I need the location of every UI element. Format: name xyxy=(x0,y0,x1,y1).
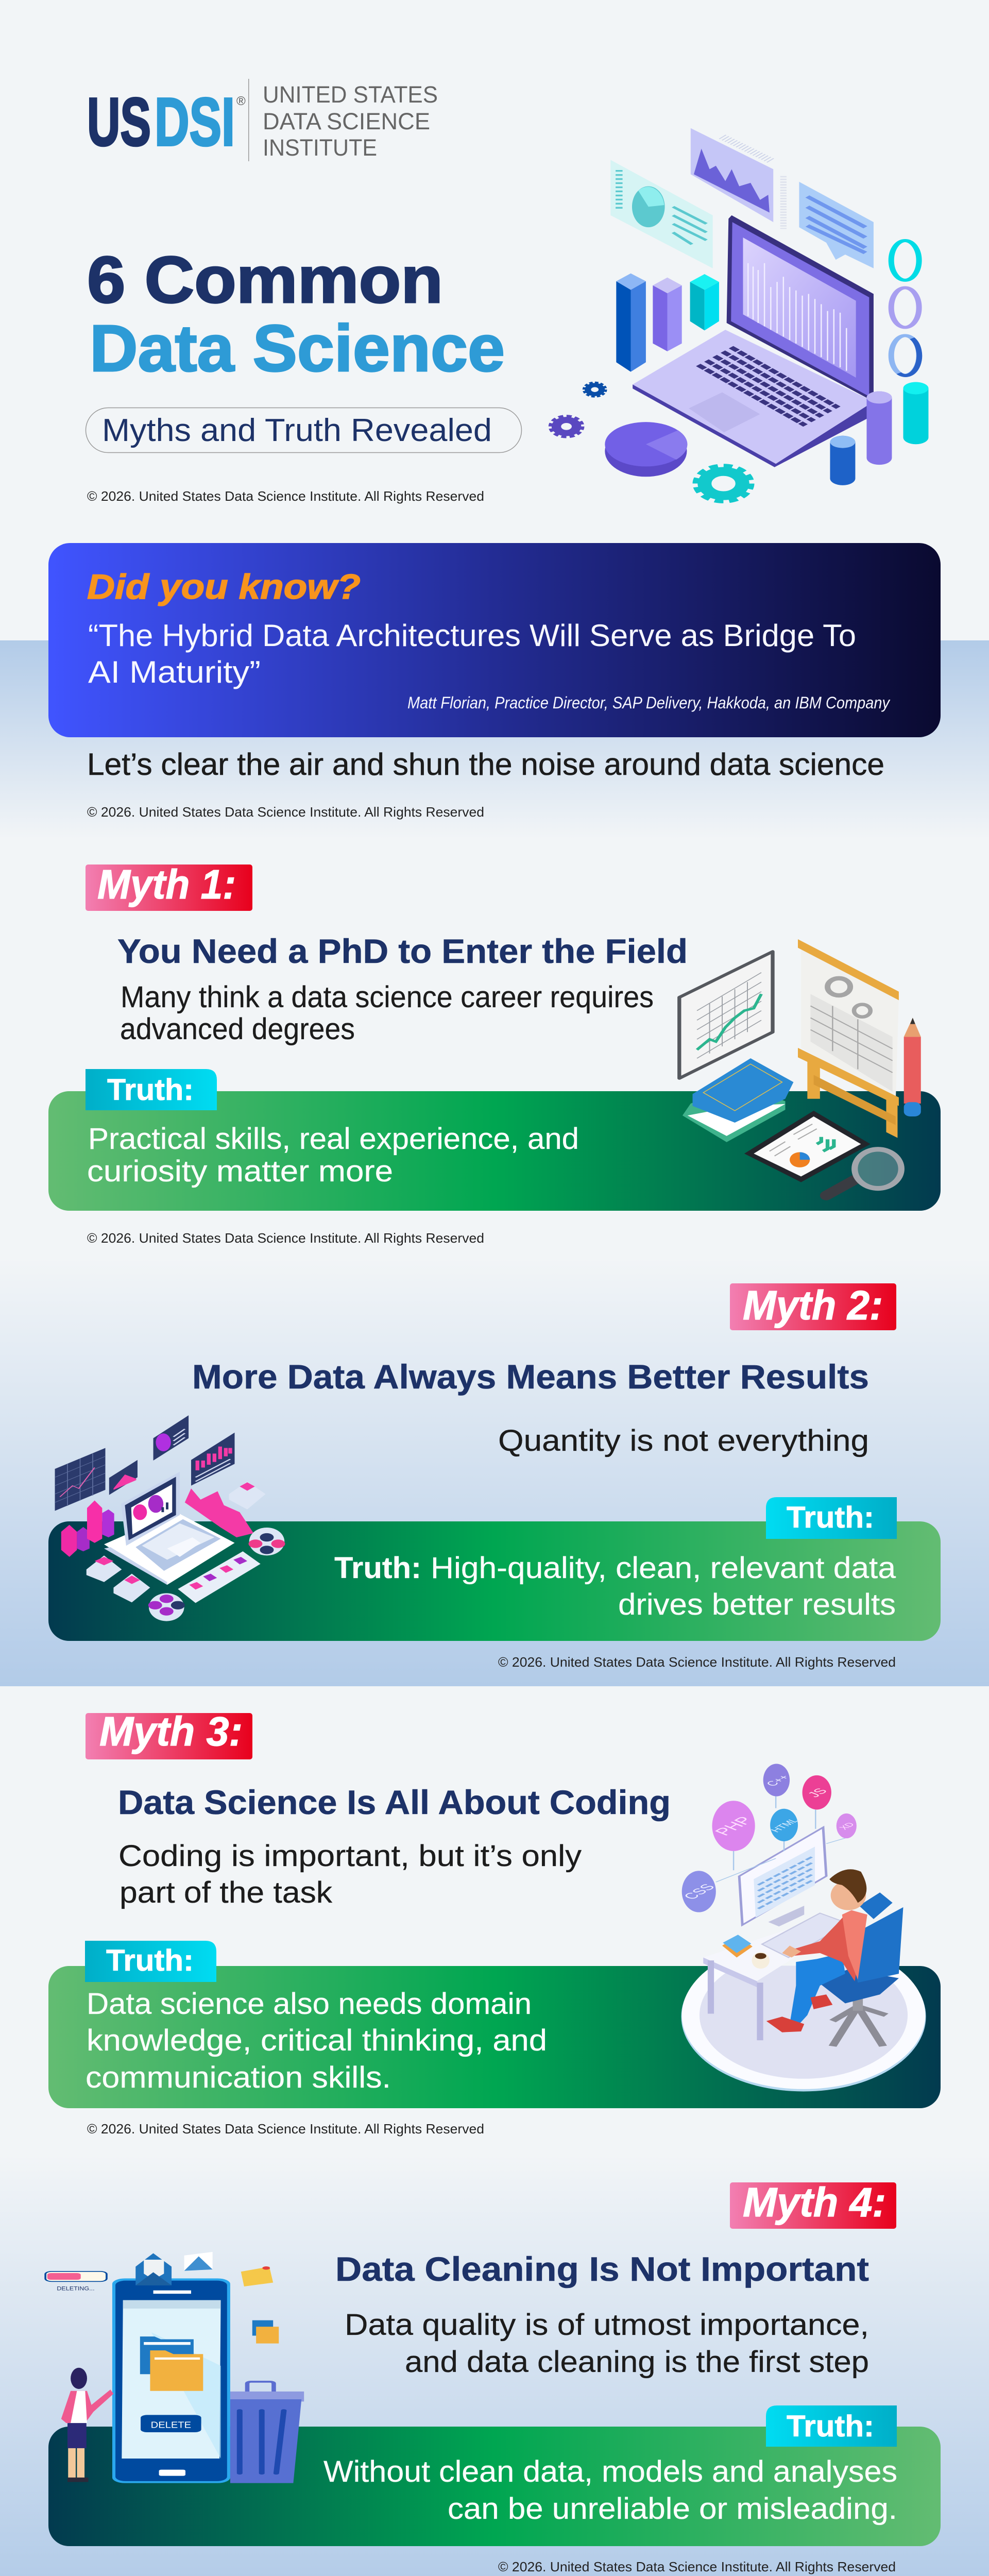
code bubbles: JS xyxy=(805,1787,831,1799)
trash can xyxy=(230,2382,304,2483)
truth tag xyxy=(86,1069,217,1110)
truth text xyxy=(323,2455,897,2526)
chart panel: speech bubble xyxy=(799,182,874,268)
tablet report xyxy=(744,1111,871,1182)
code bubbles xyxy=(680,1764,857,1912)
title: 6 Common xyxy=(87,243,443,317)
truth tag: Truth: xyxy=(787,1501,874,1534)
panel: did you know xyxy=(48,543,941,737)
copyright: © 2026. United States Data Science Institute. All Rights Reserved xyxy=(498,1654,896,1670)
truth tag xyxy=(766,2405,897,2447)
code bubbles: XD xyxy=(837,1821,857,1831)
books xyxy=(683,1058,793,1142)
laptop xyxy=(633,215,874,467)
quote: “The Hybrid Data Architectures Will Serve as Bridge To xyxy=(88,618,856,653)
heading: Data Cleaning Is Not Important xyxy=(335,2250,869,2288)
body xyxy=(118,1839,582,1909)
panel: myth 2 xyxy=(48,1282,941,1641)
floor disc xyxy=(681,1966,926,2092)
gear icons xyxy=(551,383,751,501)
progress bar xyxy=(45,2272,107,2292)
truth panel xyxy=(48,1521,941,1641)
illustration: programmer at desk xyxy=(680,1764,926,2091)
truth text: Without clean data, models and analyses xyxy=(323,2455,897,2488)
truth tag: Truth: xyxy=(106,1944,194,1977)
body: Data quality is of utmost importance, xyxy=(345,2308,869,2342)
logo: USDSI: ® xyxy=(236,94,246,108)
truth text: curiosity matter more xyxy=(87,1155,393,1188)
panel: myth 1 xyxy=(48,861,941,1211)
body xyxy=(120,980,654,1046)
badge: myth 4: Myth 4: xyxy=(743,2179,886,2225)
body: part of the task xyxy=(120,1876,333,1909)
pie disc xyxy=(605,422,687,477)
bar columns xyxy=(616,274,719,372)
cylinders xyxy=(830,382,928,485)
heading: You Need a PhD to Enter the Field xyxy=(117,932,688,970)
copyright: © 2026. United States Data Science Institute. All Rights Reserved xyxy=(87,1230,484,1246)
programmer xyxy=(766,1869,867,2032)
subtitle pill: Myths and Truth Revealed xyxy=(102,413,492,448)
heading: did you know: Did you know? xyxy=(87,567,361,606)
chart panel: area chart xyxy=(691,128,783,229)
truth text: High-quality, clean, relevant data xyxy=(431,1551,896,1585)
copyright: © 2026. United States Data Science Institute. All Rights Reserved xyxy=(87,804,484,820)
truth panel xyxy=(48,2427,941,2546)
quote: AI Maturity” xyxy=(88,655,261,689)
body: Coding is important, but it’s only xyxy=(118,1839,582,1873)
illustration: isometric laptop with data charts xyxy=(551,128,928,501)
pink graph xyxy=(185,1488,253,1537)
logo: USDSI: INSTITUTE xyxy=(263,134,377,161)
folder icon xyxy=(140,2336,203,2391)
intro line: Let’s clear the air and shun the noise around data science xyxy=(87,747,884,782)
rings xyxy=(891,241,919,376)
progress bar: DELETING... xyxy=(57,2285,95,2292)
title: Data Science xyxy=(90,312,505,385)
pink bars xyxy=(61,1500,114,1557)
body: Many think a data science career requires xyxy=(121,980,654,1014)
logo: USDSI: DSI xyxy=(155,84,235,160)
body xyxy=(345,2308,869,2379)
heading: Data Science Is All About Coding xyxy=(118,1783,671,1821)
truth tag xyxy=(766,1497,897,1539)
books and cup xyxy=(722,1935,770,1969)
woman xyxy=(61,2368,113,2482)
truth text: can be unreliable or misleading. xyxy=(448,2492,897,2526)
illustration: phone deleting files xyxy=(45,2252,304,2483)
monitor xyxy=(739,1827,826,1926)
code bubbles: PHP xyxy=(710,1815,757,1838)
panel: myth 3 xyxy=(48,1708,941,2108)
truth text xyxy=(86,1987,547,2094)
band: did you know background xyxy=(0,640,989,839)
button clusters xyxy=(148,1528,285,1621)
quote xyxy=(88,618,856,689)
truth text: Data science also needs domain xyxy=(87,1987,532,2021)
chart monitor xyxy=(679,952,773,1078)
subtitle pill xyxy=(86,408,521,452)
desk xyxy=(703,1918,848,2040)
mail and picture icons xyxy=(135,2252,279,2344)
band: myth 2 background xyxy=(0,1257,989,1686)
title xyxy=(87,243,505,385)
copyright: © 2026. United States Data Science Institute. All Rights Reserved xyxy=(498,2559,896,2574)
logo: USDSI xyxy=(87,79,438,161)
truth tag xyxy=(85,1941,216,1982)
truth panel xyxy=(48,1966,941,2108)
truth text: Practical skills, real experience, and xyxy=(88,1122,579,1156)
body: advanced degrees xyxy=(120,1012,355,1046)
delete button: DELETE xyxy=(151,2420,191,2430)
laptop xyxy=(104,1472,235,1585)
code bubbles: HTML xyxy=(769,1817,802,1834)
truth text xyxy=(87,1122,579,1188)
keyboard xyxy=(762,1913,848,1957)
pencil xyxy=(904,1018,921,1116)
logo: USDSI: DATA SCIENCE xyxy=(263,108,430,134)
truth tag: Truth: xyxy=(107,1073,194,1107)
office chair xyxy=(817,1892,903,2046)
copyright: © 2026. United States Data Science Institute. All Rights Reserved xyxy=(87,488,484,504)
illustration: laptop and pink dashboards xyxy=(55,1415,285,1621)
floating dashboards xyxy=(55,1415,235,1511)
truth text: communication skills. xyxy=(86,2061,391,2094)
badge: myth 1: Myth 1: xyxy=(97,861,236,907)
logo: USDSI: US xyxy=(87,84,151,160)
attribution: Matt Florian, Practice Director, SAP Delivery, Hakkoda, an IBM Company xyxy=(407,693,891,712)
heading: More Data Always Means Better Results xyxy=(192,1358,869,1396)
panel: myth 4 xyxy=(45,2179,941,2546)
illustration: chart board, books, magnifier xyxy=(679,939,921,1195)
chart panel: pie xyxy=(610,160,713,268)
isometric tiles xyxy=(87,1482,266,1603)
truth tag: Truth: xyxy=(787,2410,874,2443)
code bubbles: C++ xyxy=(764,1774,792,1788)
badge: myth 2: Myth 2: xyxy=(743,1282,883,1328)
delete button xyxy=(141,2415,201,2432)
phone xyxy=(112,2278,230,2483)
body: and data cleaning is the first step xyxy=(405,2345,869,2379)
code bubbles: CSS xyxy=(680,1882,719,1901)
band: myth 4 background xyxy=(0,2154,989,2576)
truth text: drives better results xyxy=(618,1588,896,1621)
badge: myth 3: Myth 3: xyxy=(99,1708,243,1754)
body: Quantity is not everything xyxy=(498,1424,869,1458)
easel xyxy=(798,939,899,1138)
truth text xyxy=(334,1551,896,1621)
truth text: knowledge, critical thinking, and xyxy=(87,2024,547,2057)
copyright: © 2026. United States Data Science Institute. All Rights Reserved xyxy=(87,2121,484,2137)
logo: USDSI: UNITED STATES xyxy=(263,81,438,108)
magnifier xyxy=(826,1149,901,1195)
truth panel xyxy=(48,1091,941,1211)
truth text: Truth: xyxy=(334,1551,421,1585)
